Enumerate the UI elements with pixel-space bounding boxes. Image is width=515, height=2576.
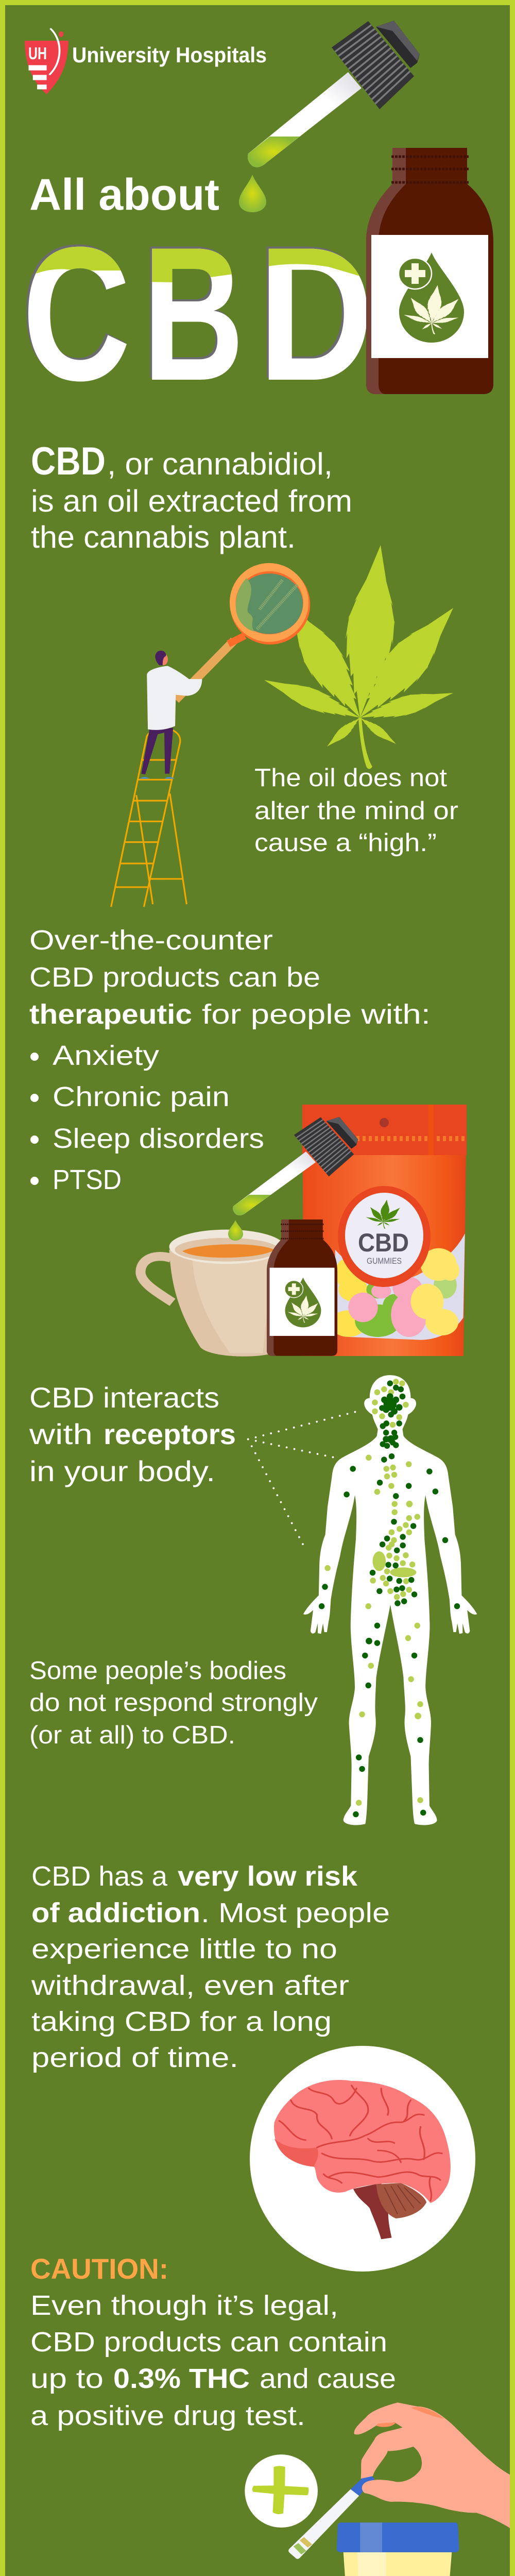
text: some bodies do not respond [29, 1657, 318, 1749]
text: caution: CBD products can contain [30, 2327, 387, 2358]
text: what CBD is [31, 439, 352, 554]
heading: CBD large letters [26, 244, 366, 382]
text: addiction risk [31, 1861, 390, 2073]
heading: CBD large letters: D [258, 208, 374, 420]
text: therapeutic uses [29, 925, 431, 1030]
icon: small CBD oil bottle [267, 1219, 337, 1356]
bag label inner [345, 1193, 423, 1278]
text: caution: and cause [260, 2363, 396, 2394]
icon: oil dropper [248, 21, 420, 167]
heading: CBD large letters: D [258, 208, 374, 420]
text: some bodies do not respond: Some people’s bodies [29, 1657, 286, 1685]
icon: CBD oil bottle [366, 148, 493, 394]
text: caution: CAUTION: [30, 2252, 168, 2285]
brain stem [353, 2183, 391, 2239]
magnifier [230, 563, 310, 645]
icon: small oil drop [228, 1220, 243, 1241]
text: some bodies do not respond: (or at all) to CBD. [29, 1721, 235, 1749]
gummies window [330, 1233, 465, 1340]
specimen cup [337, 2522, 459, 2576]
text: therapeutic uses: Over-the-counter [29, 925, 273, 956]
text: caution: 0.3% THC [113, 2363, 250, 2394]
cerebellum [376, 2183, 426, 2218]
text: oil does not alter the mind: alter the mind or [254, 797, 458, 825]
text: what CBD is: is an oil extracted from [31, 484, 352, 518]
illustration: scientist on ladder with magnifier [111, 563, 310, 907]
person legs [141, 727, 173, 774]
text: addiction risk: CBD has a [31, 1861, 168, 1892]
small leaf [365, 1199, 403, 1229]
person head [155, 651, 168, 665]
brain folds [279, 2086, 442, 2201]
hand [354, 2402, 510, 2528]
text: some bodies do not respond: do not respond strongly [29, 1689, 318, 1717]
body silhouette [303, 1375, 477, 1825]
list: conditions: Chronic pain [53, 1081, 230, 1112]
cerebrum [274, 2080, 451, 2203]
heading: CBD large letters: D [256, 206, 372, 418]
list: conditions: Sleep disorders [53, 1123, 264, 1154]
illustration: human body with receptors [248, 1375, 477, 1825]
plus badge [245, 2454, 318, 2528]
text: addiction risk: experience little to no [31, 1934, 337, 1964]
heading: All about: All about [29, 170, 219, 219]
text: oil does not alter the mind [254, 764, 458, 857]
logo: University Hospitals: UH [28, 44, 47, 63]
person feet [140, 777, 175, 778]
lab coat [147, 666, 202, 730]
text: what CBD is: CBD [31, 439, 106, 483]
text: what CBD is: , or cannabidiol, [107, 447, 333, 481]
magnifier handle [176, 640, 234, 700]
illustration: brain in white circle [250, 2046, 475, 2272]
text: caution: up to [30, 2363, 104, 2394]
text: addiction risk: period of time. [31, 2042, 238, 2073]
illustration: drug test [245, 2402, 510, 2576]
illustration: CBD gummies bag [302, 1105, 467, 1356]
illustration: cup of tea [141, 1230, 286, 1357]
text: caution: a positive drug test. [30, 2400, 305, 2431]
text: receptors: CBD interacts [29, 1381, 219, 1414]
dark receptor dots [319, 1380, 460, 1817]
list: conditions [30, 1040, 264, 1195]
heading: CBD large letters: B [143, 208, 244, 420]
heading: CBD large letters: C [20, 206, 129, 418]
text: therapeutic uses: CBD products can be [29, 962, 320, 993]
text: addiction risk: taking CBD for a long [31, 2006, 332, 2037]
bag label text: CBD [358, 1228, 409, 1257]
heading: CBD large letters: C [22, 208, 131, 420]
text: addiction risk: withdrawal, even after [31, 1970, 349, 2001]
light receptor dots [324, 1379, 423, 1806]
test strip [288, 2472, 374, 2559]
heading: CBD large letters: B [143, 208, 244, 420]
bag label [338, 1186, 431, 1287]
text: addiction risk: very low risk [178, 1861, 358, 1892]
text: therapeutic uses: for people with: [202, 999, 431, 1030]
text: receptors [29, 1381, 236, 1487]
list: conditions: PTSD [53, 1164, 122, 1195]
text: oil does not alter the mind: The oil does not [254, 764, 447, 792]
bag label subtext: GUMMIES [367, 1256, 402, 1266]
text: addiction risk: of addiction [31, 1897, 200, 1928]
text: receptors: receptors [104, 1418, 236, 1450]
text: oil does not alter the mind: cause a “high.” [254, 829, 437, 857]
text: addiction risk: . Most people [201, 1897, 390, 1928]
icon: oil drop [239, 175, 266, 212]
heading: CBD large letters: B [141, 206, 242, 418]
list: conditions: Anxiety [53, 1040, 159, 1071]
icon: cannabis leaf [261, 542, 468, 769]
text: what CBD is: the cannabis plant. [31, 520, 296, 554]
icon: small dropper [233, 1117, 358, 1215]
logo: University Hospitals: University Hospitals [72, 43, 267, 67]
text: receptors: in your body. [29, 1455, 215, 1487]
text: caution [30, 2252, 396, 2431]
heading: CBD large letters: C [22, 208, 131, 420]
text: caution: Even though it’s legal, [30, 2290, 338, 2321]
text: therapeutic uses: therapeutic [29, 999, 192, 1030]
ladder [111, 729, 186, 907]
dotted callout lines [248, 1410, 362, 1545]
logo: University Hospitals [25, 28, 267, 94]
text: receptors: with [29, 1418, 93, 1450]
